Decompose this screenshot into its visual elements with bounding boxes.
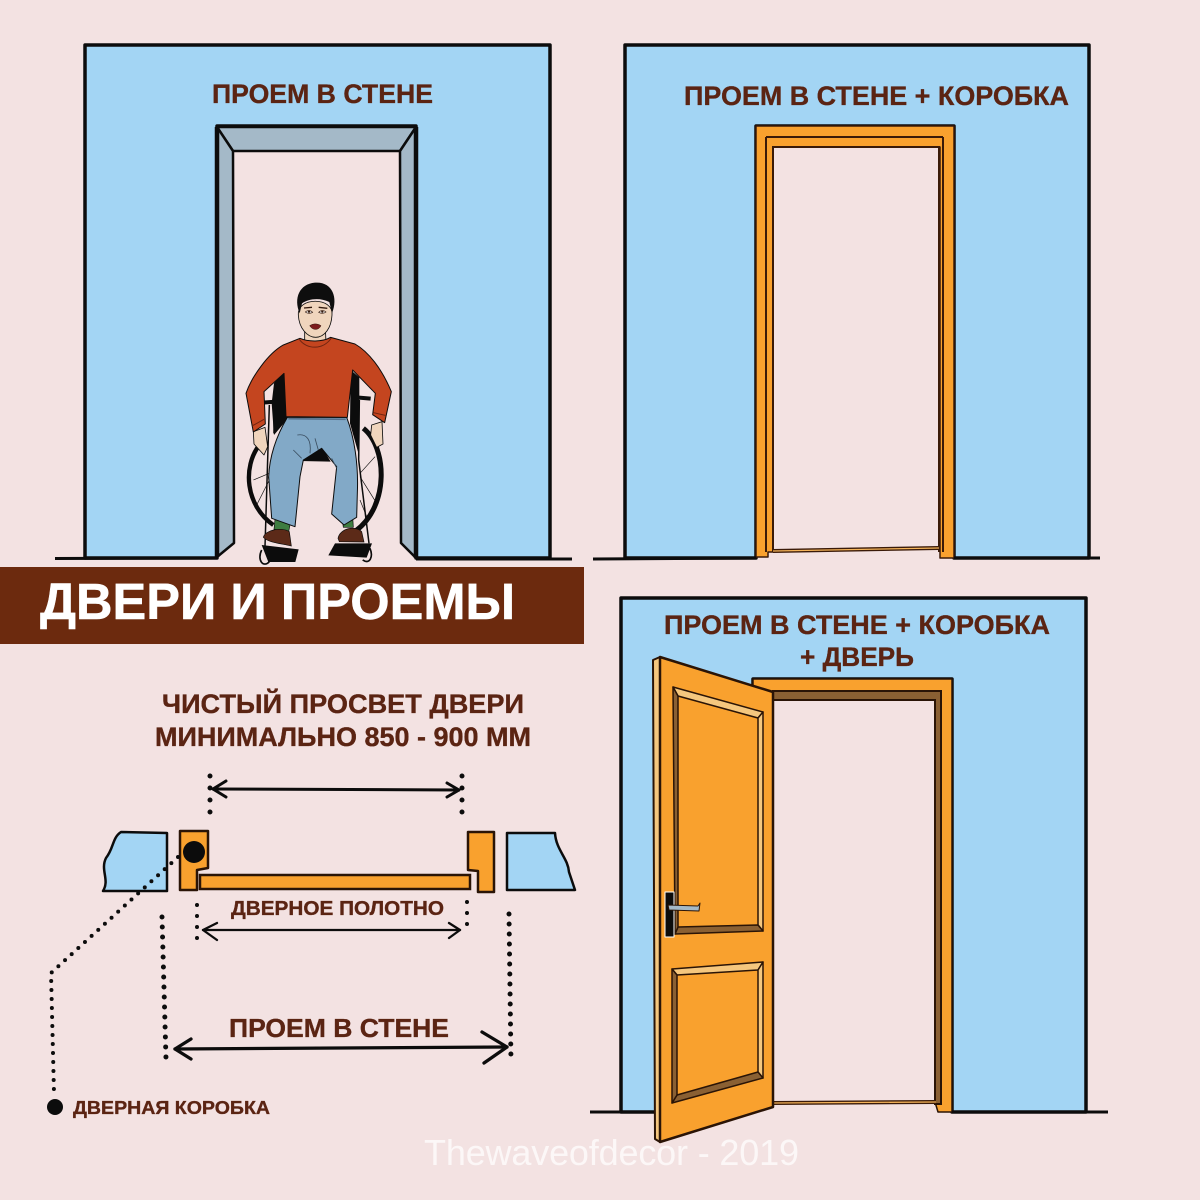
- dimension: wall opening: [162, 914, 511, 1063]
- threshold: [773, 1102, 936, 1103]
- frame lintel and jamb shadow: [773, 691, 941, 1104]
- plan diagram: [47, 776, 575, 1118]
- panel: opening with frame: [593, 45, 1100, 559]
- socks: [274, 516, 353, 532]
- heading: clear door width minimum: ЧИСТЫЙ ПРОСВЕТ ДВЕРИ: [162, 688, 524, 719]
- panel: opening in wall with wheelchair user: [55, 45, 572, 564]
- watermark: Thewaveofdecor - 2019: [424, 1132, 799, 1173]
- frame inner detail: [766, 137, 943, 552]
- wall: [625, 45, 1089, 558]
- wall with opening: [85, 45, 550, 558]
- heading: opening plus frame: ПРОЕМ В СТЕНЕ + КОРОБКА: [684, 81, 1069, 111]
- door frame: [756, 126, 954, 558]
- dimension: clear opening: [210, 776, 462, 814]
- plan: right frame: [468, 832, 494, 892]
- head: [297, 283, 334, 343]
- door frame: [753, 679, 952, 1112]
- lower door panel: [672, 962, 763, 1103]
- floor line: [593, 558, 1100, 559]
- plan: left frame: [180, 831, 208, 890]
- heading: opening plus frame plus door: [664, 610, 1050, 672]
- label: door leaf: ДВЕРНОЕ ПОЛОТНО: [231, 898, 444, 920]
- heading: clear door width minimum: МИНИМАЛЬНО 850 - 900 ММ: [155, 722, 531, 752]
- wheelchair: [249, 370, 381, 564]
- floor line: [55, 558, 572, 559]
- plan: left wall section: [103, 832, 167, 891]
- opening reveal: [217, 127, 416, 558]
- heading: opening plus frame plus door: + ДВЕРЬ: [800, 642, 914, 672]
- plan: door leaf: [200, 875, 470, 889]
- upper door panel: [673, 687, 763, 934]
- label: wall opening: ПРОЕМ В СТЕНЕ: [229, 1013, 449, 1043]
- door handle: [665, 892, 700, 937]
- leader line to frame label: [51, 857, 178, 1093]
- banner title: [0, 567, 584, 644]
- heading: clear door width minimum: [155, 688, 531, 752]
- panel: opening with frame and door: [590, 598, 1108, 1142]
- jeans: [269, 417, 358, 527]
- frame marker dot: [183, 841, 205, 863]
- shoes: [263, 528, 364, 546]
- sweater collar and cuffs: [252, 338, 385, 426]
- open door leaf: [653, 657, 773, 1142]
- legend: door frame: ДВЕРНАЯ КОРОБКА: [73, 1098, 270, 1118]
- banner title: ДВЕРИ И ПРОЕМЫ: [40, 573, 515, 630]
- person in wheelchair: [246, 283, 391, 564]
- wall: [621, 598, 1086, 1112]
- hands: [253, 422, 383, 455]
- threshold: [773, 548, 939, 551]
- sweater: [246, 337, 391, 432]
- plan: right wall section: [507, 833, 575, 890]
- floor line: [590, 1110, 1108, 1114]
- heading: opening in wall: ПРОЕМ В СТЕНЕ: [212, 79, 433, 109]
- heading: opening plus frame plus door: ПРОЕМ В СТЕНЕ + КОРОБКА: [664, 610, 1050, 640]
- dimension: door leaf: [197, 902, 467, 941]
